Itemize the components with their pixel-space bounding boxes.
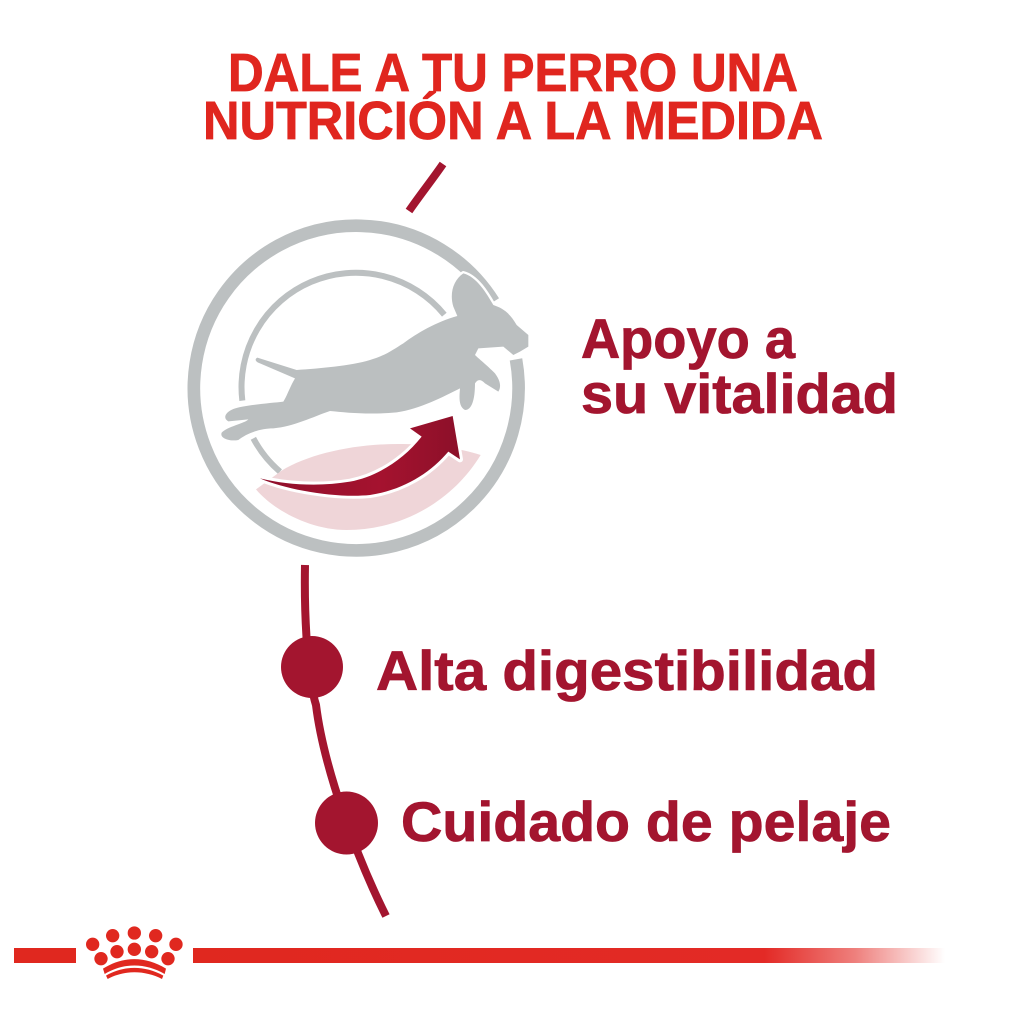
title: NUTRICIÓN A LA MEDIDA xyxy=(203,91,823,151)
icon: royal crown logo xyxy=(86,926,183,979)
title: DALE A TU PERRO UNA xyxy=(228,43,798,103)
title xyxy=(203,43,823,151)
inner ring xyxy=(242,273,444,472)
dog silhouette xyxy=(221,273,528,440)
benefit label: coat care: Cuidado de pelaje xyxy=(401,790,891,853)
outer ring xyxy=(194,226,519,550)
connector line: title to icon xyxy=(409,164,443,211)
benefit label: vitality xyxy=(581,307,898,425)
benefit label: vitality: Apoyo a xyxy=(581,307,796,370)
bullet: coat care xyxy=(315,792,378,854)
footer rule left xyxy=(14,948,76,963)
footer rule right with fade xyxy=(193,948,945,963)
bullet: digestibility xyxy=(281,636,343,698)
pink ground shape xyxy=(256,444,481,530)
icon: vitality badge with jumping dog xyxy=(194,226,528,550)
benefit label: vitality: su vitalidad xyxy=(581,362,898,425)
rising arrow xyxy=(260,416,460,496)
benefit label: digestibility: Alta digestibilidad xyxy=(376,639,878,702)
timeline with bullets xyxy=(281,565,386,916)
